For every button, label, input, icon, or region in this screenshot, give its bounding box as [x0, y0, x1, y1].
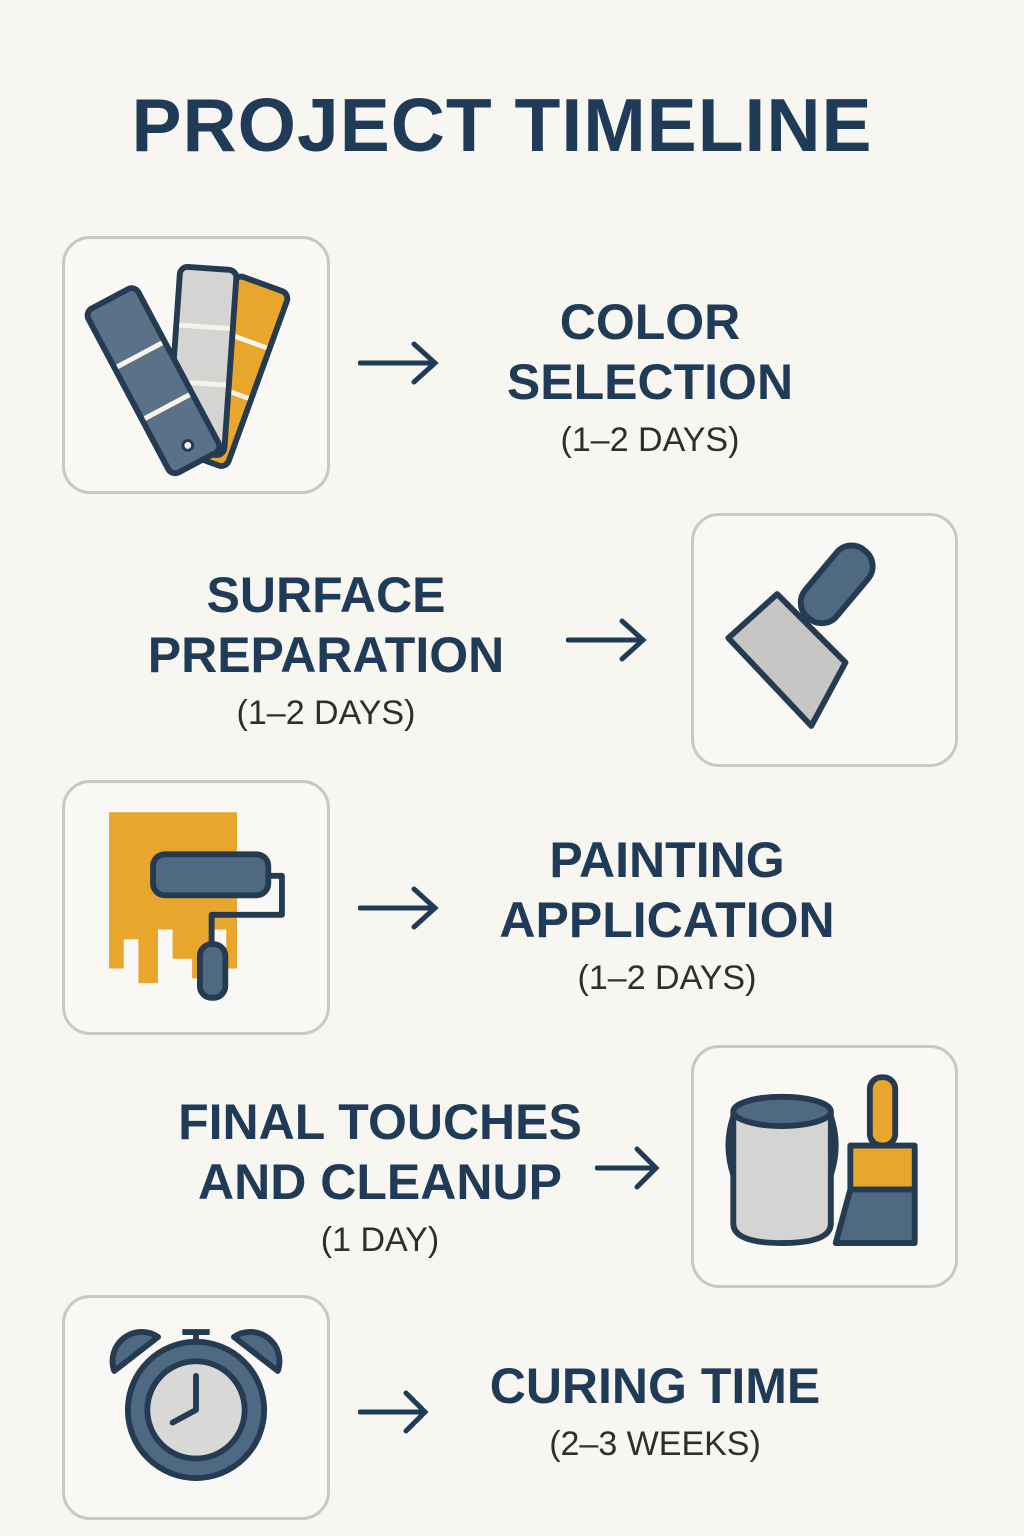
text: curing time: CURING TIME	[490, 1358, 820, 1414]
text: final touches: FINAL TOUCHES	[178, 1094, 582, 1150]
text: surface preparation: SURFACE	[207, 567, 445, 623]
text: color selection: SELECTION	[507, 354, 793, 410]
text: surface preparation: (1–2 DAYS)	[237, 694, 415, 732]
text: final touches: (1 DAY)	[321, 1221, 439, 1259]
panel: color swatches icon	[62, 236, 330, 494]
arrow 1	[358, 342, 439, 384]
arrow 5	[358, 1390, 428, 1434]
arrow 3	[358, 886, 439, 930]
text: final touches: AND CLEANUP	[198, 1154, 562, 1210]
panel: bucket and brush icon	[691, 1045, 958, 1288]
text: painting application	[499, 832, 835, 997]
text: color selection: COLOR	[560, 294, 740, 350]
text: final touches	[178, 1094, 582, 1259]
arrow 4	[595, 1146, 660, 1190]
text: curing time: (2–3 WEEKS)	[549, 1425, 761, 1463]
text: color selection	[507, 294, 793, 459]
text: curing time	[490, 1358, 820, 1463]
title: PROJECT TIMELINE	[131, 83, 873, 167]
text: painting application: PAINTING	[549, 832, 785, 888]
panel: scraper icon	[691, 513, 958, 767]
text: surface preparation: PREPARATION	[148, 627, 504, 683]
text: color selection: (1–2 DAYS)	[561, 421, 739, 459]
text: surface preparation	[148, 567, 504, 732]
panel: roller icon	[62, 780, 330, 1035]
arrow 2	[566, 618, 647, 662]
panel: alarm clock icon	[62, 1295, 330, 1520]
text: painting application: APPLICATION	[499, 892, 835, 948]
text: painting application: (1–2 DAYS)	[578, 959, 756, 997]
